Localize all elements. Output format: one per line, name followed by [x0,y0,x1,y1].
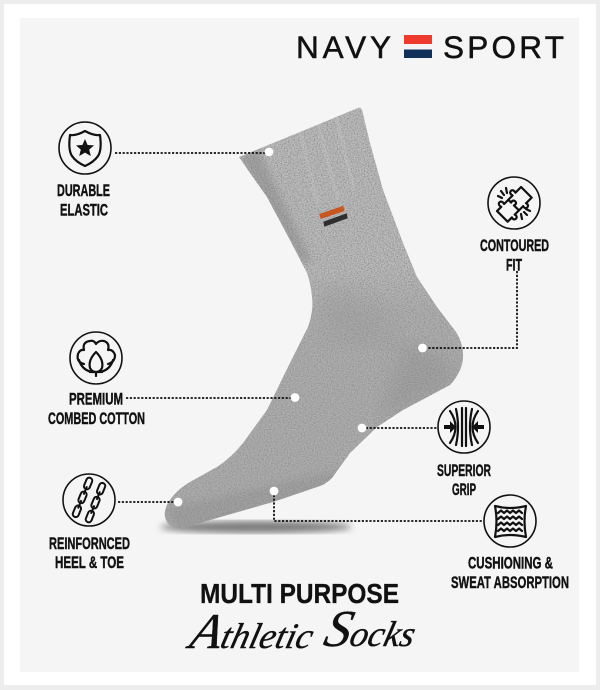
feature: contoured fit [480,177,549,274]
label: durable elastic: DURABLE [57,181,110,200]
sock logo stripes [319,206,348,227]
label: contoured fit: FIT [506,256,522,274]
brand logo: Navy Sport: SPORT [443,29,564,65]
label: cushioning and sweat absorption: CUSHIONING & [468,554,553,572]
label: superior grip: SUPERIOR [437,461,491,480]
label: reinforced heel and toe [49,534,130,572]
headline: athletic socks script: Athletic [182,604,321,659]
icon: puzzle pieces [488,177,540,229]
brand logo: Navy Sport [296,29,564,65]
icon: wavy cushion [484,495,536,547]
label: cushioning and sweat absorption [451,554,569,592]
label: premium combed cotton [48,390,145,428]
label: reinforced heel and toe: REINFORNCED [49,534,130,553]
icon: compression arrows [438,401,490,453]
feature: superior grip [437,401,491,499]
label: durable elastic: ELASTIC [60,200,108,220]
label: premium combed cotton: PREMIUM [69,390,123,408]
icon: shield with star [59,122,111,174]
label: durable elastic [57,181,110,220]
sock illustration [165,108,463,532]
headline: multi purpose: MULTI PURPOSE [200,578,399,609]
label: superior grip: GRIP [452,480,476,499]
headline: athletic socks script [182,601,423,659]
feature: premium combed cotton [48,332,145,428]
sock shadow [160,521,352,533]
feature: cushioning and sweat absorption [451,495,569,592]
feature: reinforced heel and toe [49,474,130,572]
leader lines [115,153,517,521]
label: contoured fit: CONTOURED [480,236,549,255]
brand logo: Navy Sport: NAVY [296,29,391,65]
headline: athletic socks script: Socks [319,601,423,658]
label: premium combed cotton: COMBED COTTON [48,409,145,428]
label: superior grip [437,461,491,499]
marker dots [174,148,427,506]
feature: durable elastic [57,122,111,220]
icon: chains [63,474,115,526]
label: reinforced heel and toe: HEEL & TOE [55,553,124,572]
label: contoured fit [480,236,549,274]
icon: cotton boll [70,332,122,384]
